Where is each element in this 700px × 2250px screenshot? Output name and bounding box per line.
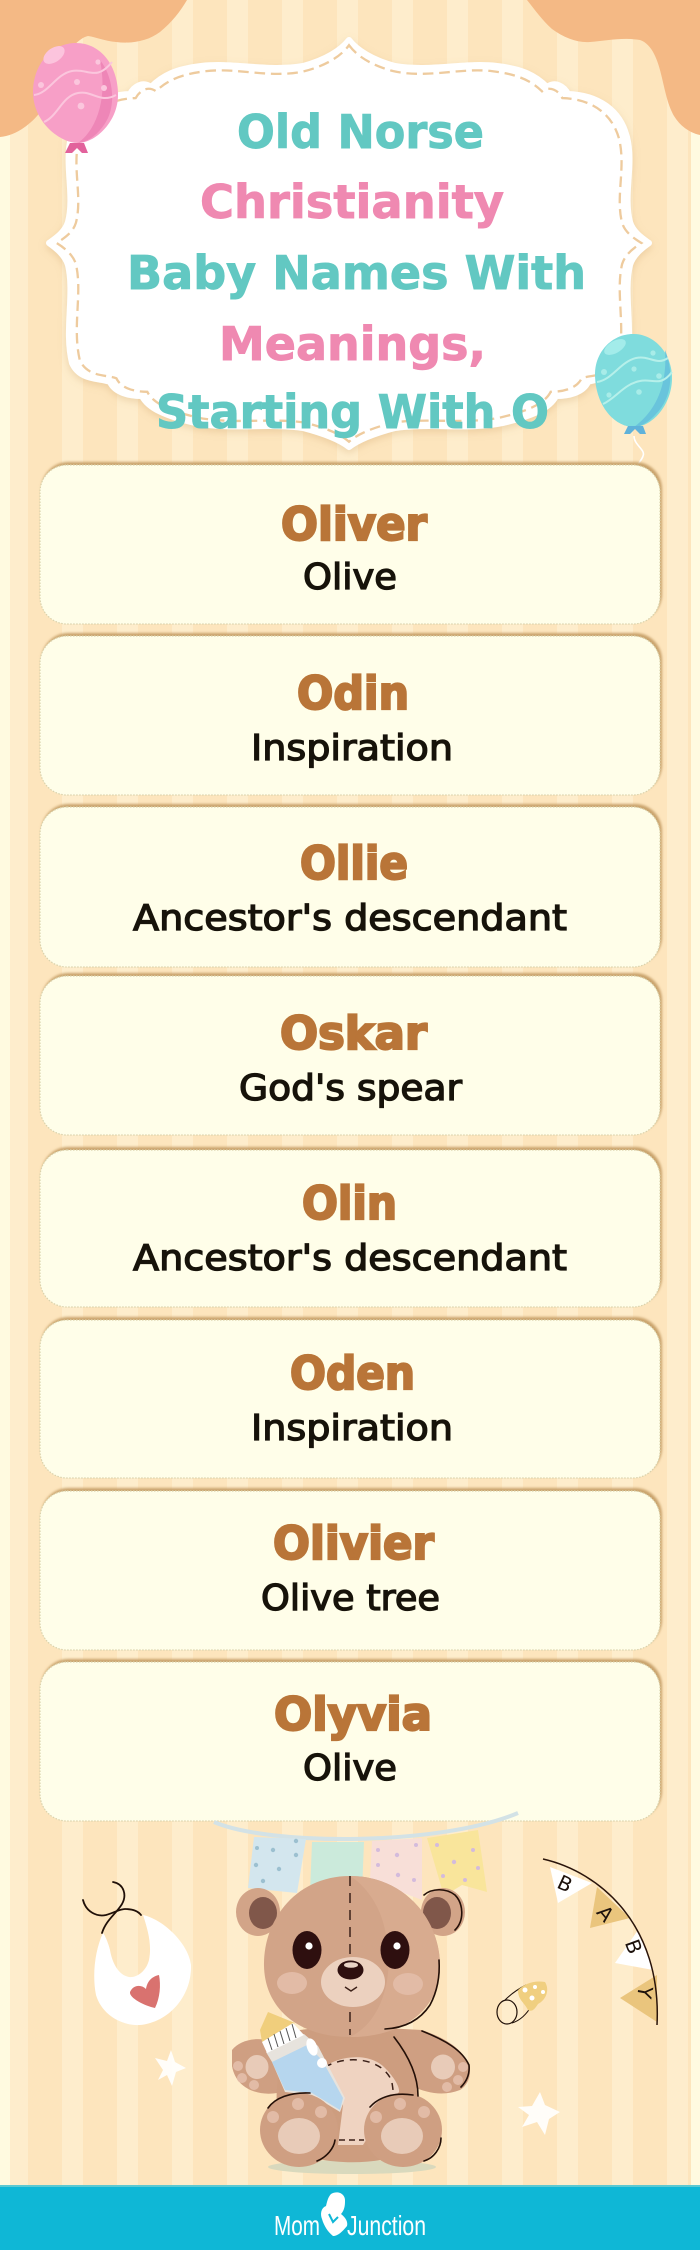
footer logo: Junction xyxy=(347,2210,426,2241)
teddy bear xyxy=(232,1876,470,2174)
card: Oliver: Oliver xyxy=(281,498,428,551)
footer band xyxy=(0,2185,700,2250)
baby pennant banner: B xyxy=(554,1870,576,1897)
card: Oliver: Olive xyxy=(303,557,397,598)
card: Olyvia: Olive xyxy=(303,1748,397,1789)
icon: pink balloon xyxy=(33,42,118,153)
top left drape xyxy=(0,0,187,137)
card: Oden xyxy=(40,1317,662,1478)
baby pennant banner: A xyxy=(592,1901,619,1927)
top right drape xyxy=(527,0,700,135)
icon: bib xyxy=(83,1882,191,2025)
card: Ollie: Ancestor's descendant xyxy=(133,898,567,939)
card: Olin xyxy=(40,1147,662,1307)
footer logo xyxy=(274,2192,426,2241)
baby pennant banner: B xyxy=(620,1936,647,1957)
baby pennant banner: Y xyxy=(632,1983,658,2001)
footer logo: Mom xyxy=(274,2210,320,2241)
card: Odin: Inspiration xyxy=(251,728,453,769)
title text: Old Norse xyxy=(237,105,484,159)
card: Ollie: Ollie xyxy=(300,837,408,890)
card: Oden: Oden xyxy=(290,1347,415,1400)
baby pennant banner xyxy=(543,1859,658,2025)
card: Odin: Odin xyxy=(297,667,409,720)
card: Odin xyxy=(40,633,662,795)
title text: Baby Names With xyxy=(127,246,586,300)
card: Olin: Olin xyxy=(302,1177,397,1230)
card: Oden: Inspiration xyxy=(251,1408,453,1449)
card: Olyvia: Olyvia xyxy=(274,1688,432,1741)
icon: safety pin xyxy=(497,1981,547,2024)
card: Oliver xyxy=(40,462,662,624)
title text xyxy=(127,105,586,439)
card: Olivier: Olive tree xyxy=(261,1578,440,1619)
card: Olivier: Olivier xyxy=(273,1517,435,1570)
card: Olyvia xyxy=(40,1659,662,1821)
card: Oskar xyxy=(40,973,662,1135)
card: Ollie xyxy=(40,804,662,967)
title text: Starting With O xyxy=(156,385,549,439)
card: Oskar: Oskar xyxy=(280,1007,428,1060)
icon: star right xyxy=(518,2092,560,2135)
name cards xyxy=(40,462,662,1821)
icon: star left xyxy=(155,2050,186,2086)
card: Oskar: God's spear xyxy=(239,1068,462,1109)
bunting flags xyxy=(214,1813,518,1900)
title text: Meanings, xyxy=(219,317,486,371)
icon: blue balloon xyxy=(595,334,672,468)
card: Olin: Ancestor's descendant xyxy=(133,1238,567,1279)
title text: Christianity xyxy=(200,175,504,229)
card: Olivier xyxy=(40,1488,662,1650)
title plaque xyxy=(49,40,649,447)
